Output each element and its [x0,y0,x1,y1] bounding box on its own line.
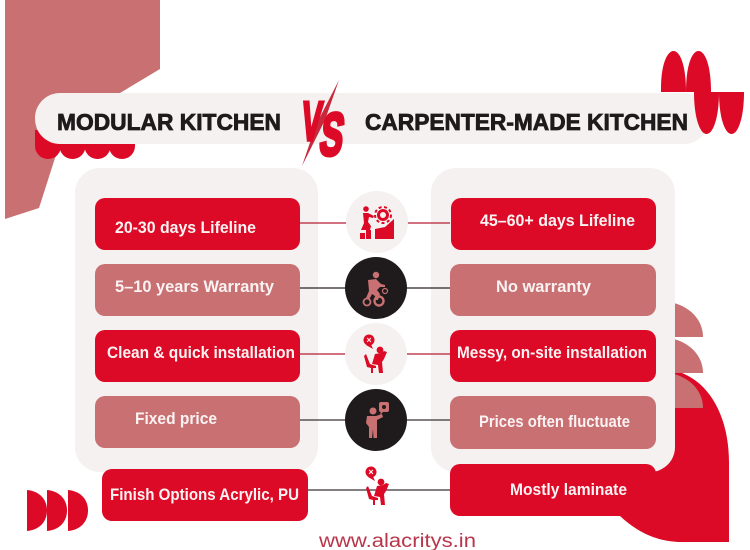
heading: modular kitchen: MODULAR KITCHEN [57,109,281,135]
icon: seated person with cross on light circle [345,323,407,385]
heading: carpenter-made kitchen: CARPENTER-MADE KITCHEN [365,109,688,135]
decorative red waves: bottom half ellipses [694,92,744,134]
row 5: finish: Finish Options Acrylic, PU [110,486,299,504]
panel: modular kitchen [75,168,318,472]
row 3: installation: Messy, on-site installation [457,344,647,362]
decorative pink shape: top left [5,0,160,219]
row 1: lifeline: 20-30 days Lifeline [115,219,256,237]
row 4: price: Prices often fluctuate [479,413,630,431]
row 5: finish: Mostly laminate [510,481,627,499]
connector lines [300,223,450,490]
versus mark: V [299,92,325,152]
row 2: warranty [95,264,656,316]
decorative half circles: bottom left [27,490,88,531]
row 4: price [95,396,656,449]
row 2: warranty: 5–10 years Warranty [115,278,275,296]
row 4: price: Fixed price [135,410,217,428]
row 1: lifeline [95,198,656,250]
icon: person with star speech bubble on dark circle [345,389,407,451]
icon: seated person with cross on light circle: × [366,335,372,345]
header bar [35,93,709,144]
decorative red scallop under left header [35,130,135,159]
row 5: finish [102,464,656,521]
versus mark [299,80,348,168]
row 3: installation [95,330,656,382]
decorative red quarter shape: bottom right [600,373,729,542]
row 3: installation: Clean & quick installation [107,344,295,362]
icon: seated person with cross, no circle: × [368,467,374,477]
decorative pink quarter shapes [670,302,703,408]
row 2: warranty: No warranty [496,278,592,296]
icon: runner on gears on dark circle [345,257,407,319]
versus mark: S [316,101,348,168]
icon: climbing gears on light circle [346,191,408,253]
icon: seated person with cross, no circle [366,466,389,505]
panel: carpenter-made kitchen [431,168,675,472]
row 1: lifeline: 45–60+ days Lifeline [480,212,635,230]
decorative red waves: top half ellipses [661,51,711,92]
